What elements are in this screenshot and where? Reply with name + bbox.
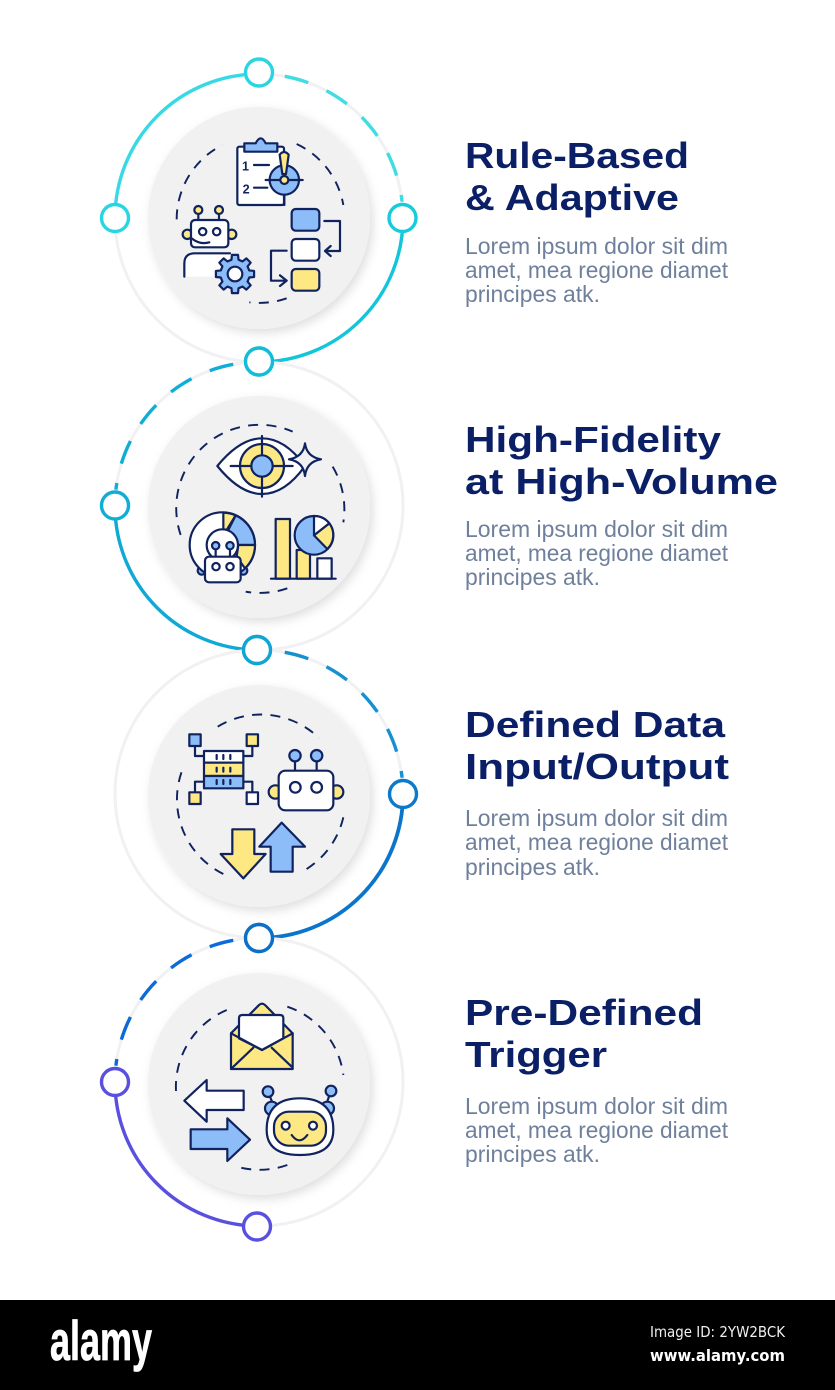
solid arc top to left: [115, 74, 259, 218]
grey disc 4: [148, 973, 370, 1195]
heading 3: Input/Output: [465, 746, 729, 787]
panel: step 3 defined data input/output: [115, 636, 729, 952]
website: www.alamy.com: [650, 1346, 785, 1365]
heading 4: Pre-Defined: [465, 992, 703, 1033]
body text 1: Lorem ipsum dolor sit dim: [465, 233, 728, 259]
grey disc 1: [148, 107, 370, 329]
solid arc left to bottom: [115, 506, 257, 650]
body text 4: amet, mea regione diamet: [465, 1117, 729, 1143]
icon: robot, checklist and flow: [177, 138, 343, 303]
body text 4: principes atk.: [465, 1141, 600, 1167]
body text 3: Lorem ipsum dolor sit dim: [465, 805, 728, 831]
body text 3: principes atk.: [465, 854, 600, 880]
alamy logo text: alamy: [50, 1309, 152, 1372]
dashed arc top to right: [285, 652, 402, 778]
node markers 1: [102, 59, 416, 375]
panel: step 2 high-fidelity at high-volume: [102, 348, 778, 664]
icon: robot, checklist and flow: 2: [243, 182, 250, 196]
dashed arc top to left: [116, 364, 233, 490]
heading 3: Defined Data: [465, 704, 726, 745]
body text 2: amet, mea regione diamet: [465, 540, 729, 566]
icon: robot, checklist and flow: 1: [242, 160, 249, 174]
grey disc 3: [148, 685, 370, 907]
node markers 2: [102, 348, 272, 664]
heading 4: Trigger: [465, 1034, 607, 1075]
body text 1: amet, mea regione diamet: [465, 257, 729, 283]
dashed arc top to left: [116, 940, 233, 1066]
solid arc bottom to right: [259, 218, 403, 362]
heading 2: at High-Volume: [465, 461, 778, 502]
icon: eye target, robot and charts: [176, 425, 344, 593]
heading 2: High-Fidelity: [465, 419, 721, 460]
solid arc left to bottom: [115, 1082, 257, 1226]
node markers 4: [102, 924, 272, 1240]
panel: step 1 rule-based and adaptive: [102, 59, 729, 375]
grey disc 2: [148, 396, 370, 618]
body text 3: amet, mea regione diamet: [465, 829, 729, 855]
icon: envelope, arrows and robot: [176, 1004, 343, 1170]
heading 1: & Adaptive: [465, 177, 679, 218]
footer background: [0, 1300, 835, 1390]
body text 4: Lorem ipsum dolor sit dim: [465, 1093, 728, 1119]
pale ring 2: [115, 362, 403, 650]
heading 1: Rule-Based: [465, 135, 689, 176]
image id: Image ID: 2YW2BCK: [650, 1323, 786, 1341]
body text 1: principes atk.: [465, 281, 600, 307]
body text 2: principes atk.: [465, 564, 600, 590]
solid arc right to bottom: [259, 794, 403, 938]
panel: step 4 pre-defined trigger: [102, 924, 729, 1240]
pale ring 4: [115, 938, 403, 1226]
body text 2: Lorem ipsum dolor sit dim: [465, 516, 728, 542]
node markers 3: [244, 636, 416, 952]
pale ring 1: [115, 74, 403, 362]
footer: black watermark bar: [0, 1300, 835, 1390]
pale ring 3: [115, 650, 403, 938]
dashed arc top to right: [285, 76, 402, 202]
icon: data server, robot and arrows: [177, 715, 343, 878]
